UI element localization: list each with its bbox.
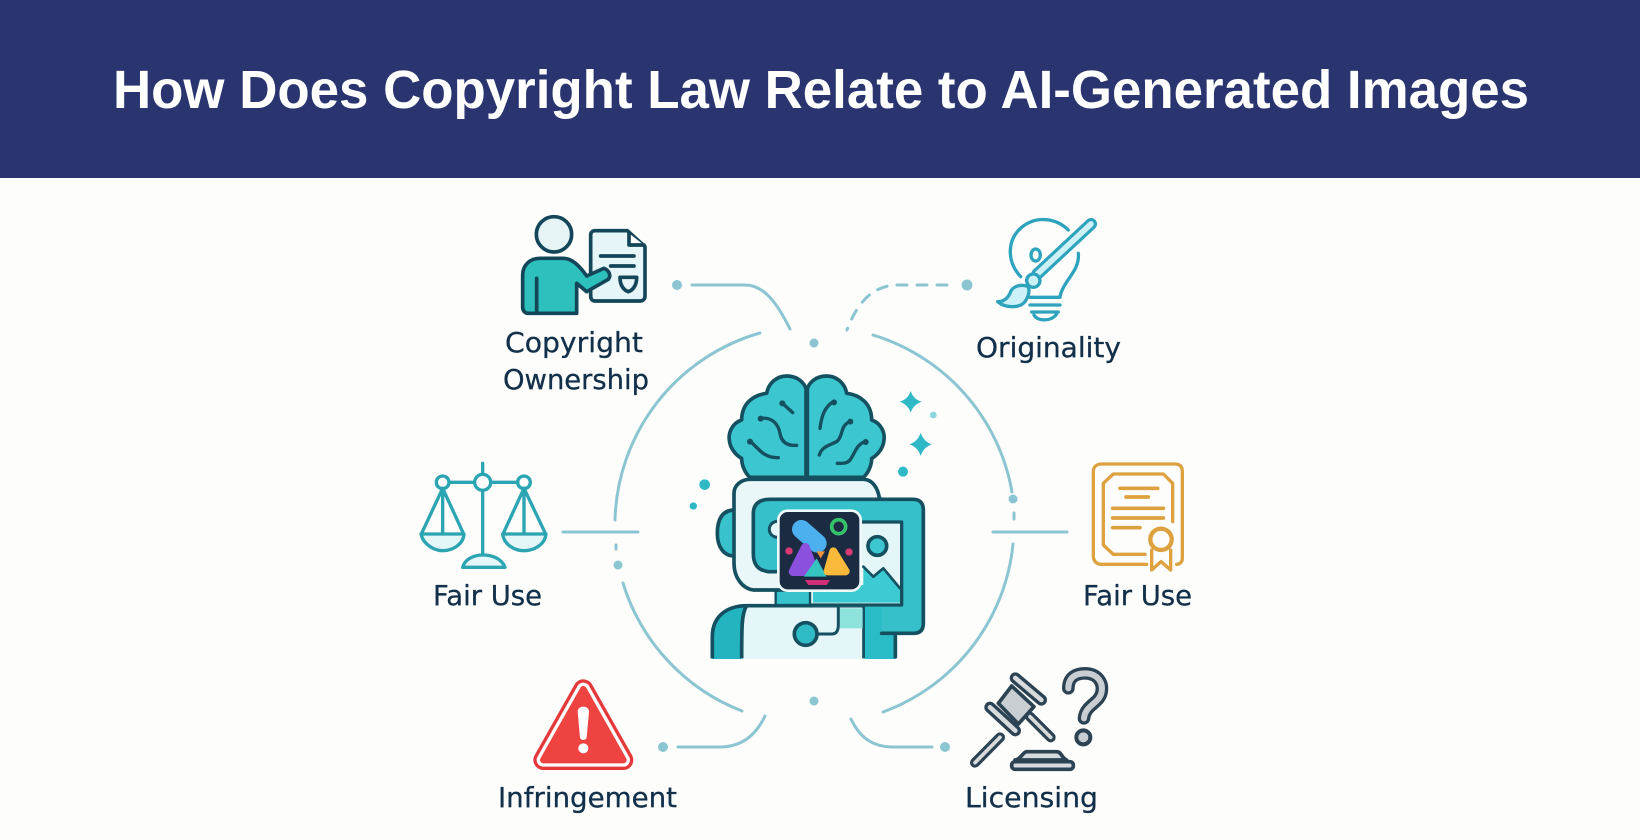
robot body	[712, 606, 865, 659]
ear	[717, 510, 735, 556]
title: How Does Copyright Law Relate to AI-Generated Images	[113, 60, 1529, 120]
icon: gavel and question mark	[975, 673, 1102, 769]
label: Fair Use left: Fair Use	[433, 580, 542, 612]
central ring and connectors	[563, 280, 1067, 752]
icon: warning triangle	[543, 689, 623, 760]
label: Originality: Originality	[976, 332, 1121, 364]
label: Fair Use right: Fair Use	[1083, 580, 1192, 612]
label: Licensing: Licensing	[965, 782, 1098, 814]
robot head	[734, 479, 880, 590]
label: Copyright Ownership: Copyright	[505, 327, 643, 359]
picture card	[778, 511, 861, 591]
icon: person with document	[523, 217, 645, 313]
robot right body	[865, 607, 896, 659]
icon: lightbulb and paintbrush	[998, 220, 1091, 320]
icon: certificate	[1093, 464, 1182, 570]
teal screen	[753, 499, 923, 633]
picture frame	[812, 522, 902, 604]
neck	[776, 591, 810, 606]
label: Copyright Ownership	[503, 327, 649, 396]
label: Infringement: Infringement	[498, 782, 677, 814]
sparkles	[690, 391, 937, 510]
brain	[729, 376, 884, 477]
label: Copyright Ownership: Ownership	[503, 364, 649, 396]
icon: AI robot with brain and image	[690, 376, 937, 659]
header banner	[0, 0, 1640, 178]
icon: balance scales	[421, 463, 546, 567]
